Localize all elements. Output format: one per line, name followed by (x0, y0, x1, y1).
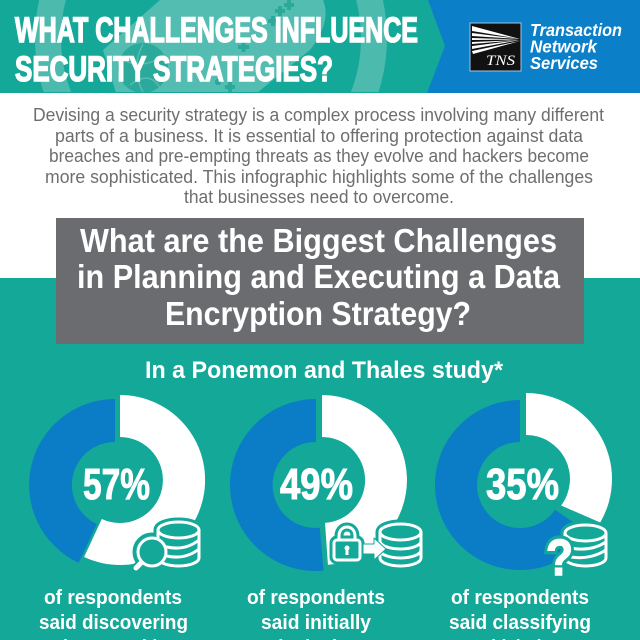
subheading: In a Ponemon and Thales study* (145, 357, 504, 384)
chart: 57% donut: 57% (83, 460, 150, 509)
panel: header (0, 0, 640, 93)
logo wordmark: Transaction (530, 20, 622, 40)
chart: 49% donut: 49% (280, 460, 353, 509)
intro text: more sophisticated. This infographic highlights some of the challenges (45, 166, 593, 187)
label: 35% (449, 586, 591, 640)
icon: question mark and database: ? (546, 529, 573, 586)
logo wordmark: Services (530, 53, 598, 73)
intro text: parts of a business. It is essential to offering protection against data (55, 125, 584, 146)
label: 49%: said initially (261, 611, 372, 634)
label: 49%: of respondents (247, 586, 385, 609)
header watermark (35, 0, 387, 92)
icon: lock, arrow and database (334, 524, 421, 566)
label: 35%: of respondents (451, 586, 589, 609)
panel: teal lower background (0, 278, 640, 640)
intro text (33, 104, 604, 207)
icon: question mark and database (546, 525, 606, 586)
panel: section heading: Encryption Strategy? (165, 295, 471, 332)
label: 57% (39, 586, 188, 640)
logo wordmark: Network (530, 36, 598, 56)
panel: section heading: What are the Biggest Challenges (80, 222, 557, 259)
icon: question mark and database: ? (546, 529, 573, 586)
logo: TNS (470, 23, 521, 71)
label: 35%: said classifying (449, 611, 591, 634)
intro text: Devising a security strategy is a complex process involving many different (33, 104, 604, 125)
label: 57%: of respondents (44, 586, 182, 609)
header title (15, 11, 418, 89)
panel: section heading (56, 218, 584, 344)
logo wordmark (530, 20, 622, 73)
header title: WHAT CHALLENGES INFLUENCE (15, 11, 418, 50)
label: 49% (247, 586, 385, 640)
header title: SECURITY STRATEGIES? (15, 50, 333, 89)
panel: section heading: in Planning and Executing a Data (77, 258, 561, 295)
label: 57%: said discovering (39, 611, 188, 634)
chart: 35% donut: 35% (486, 460, 559, 509)
intro text: that businesses need to overcome. (184, 186, 454, 207)
chart: 35% donut (435, 393, 612, 586)
chart: 57% donut (29, 395, 205, 568)
logo: TNS: TNS (486, 53, 516, 69)
chart: 49% donut (230, 395, 421, 571)
icon: arrow (363, 538, 386, 560)
intro text: breaches and pre-empting threats as they evolve and hackers become (49, 145, 589, 166)
icon: magnifier and database (136, 522, 199, 568)
